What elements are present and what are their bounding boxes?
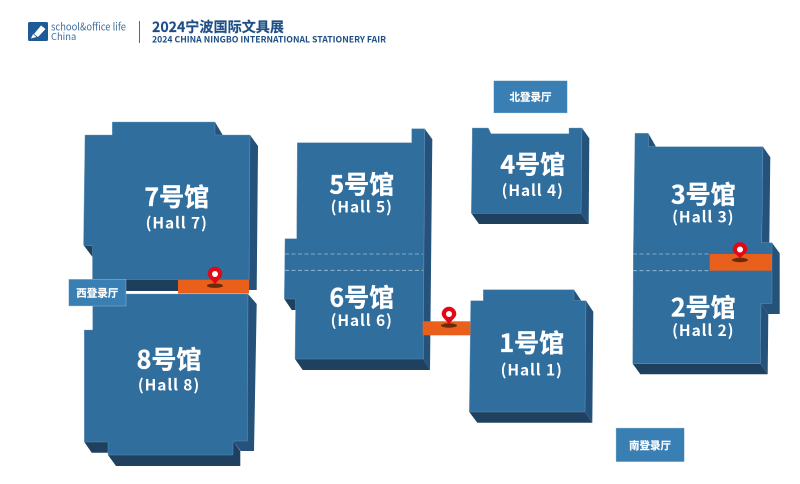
hall 1 name: 1号馆 <box>499 324 564 360</box>
hall 6 name: 6号馆 <box>329 279 394 315</box>
header divider <box>139 21 140 43</box>
panel: hall 1 <box>469 290 593 423</box>
hall 8 name: 8号馆 <box>137 341 201 377</box>
hall 6 english: (Hall 6) <box>331 309 393 331</box>
panel: halls 3 and 2 <box>633 133 780 374</box>
hall 1 english: (Hall 1) <box>501 359 563 381</box>
north lobby: 北登录厅 <box>510 90 552 104</box>
hall 8 english: (Hall 8) <box>138 374 200 396</box>
hall 4 english: (Hall 4) <box>502 179 564 201</box>
icon: pin west <box>207 267 223 288</box>
panel: hall 4 <box>471 128 589 224</box>
hall 5 name: 5号馆 <box>329 165 394 201</box>
panel: hall 8 <box>84 294 257 466</box>
west corridor <box>178 280 249 294</box>
hall 7 english: (Hall 7) <box>146 211 208 233</box>
hall 7 name: 7号馆 <box>144 178 209 214</box>
brand name: school&office life <box>51 18 126 34</box>
brand region: China <box>51 29 76 43</box>
subtitle: 2024 CHINA NINGBO INTERNATIONAL STATIONERY FAIR <box>152 32 386 46</box>
west lobby <box>69 279 126 306</box>
icon: logo pencil <box>28 22 48 41</box>
icon: pin central <box>441 307 457 328</box>
hall 4 name: 4号馆 <box>500 145 565 181</box>
hall 3 name: 3号馆 <box>671 176 736 212</box>
header <box>28 17 386 46</box>
panel: halls 5 and 6 <box>284 129 432 370</box>
south lobby <box>616 428 684 462</box>
corridor shadow <box>126 280 178 291</box>
title: 2024宁波国际文具展 <box>152 17 284 37</box>
hall 3 english: (Hall 3) <box>672 206 734 228</box>
orange corridor <box>710 254 772 271</box>
hall 2 name: 2号馆 <box>671 289 736 325</box>
hall 5 english: (Hall 5) <box>331 196 393 218</box>
panel: hall 7 <box>84 122 258 291</box>
south lobby: 南登录厅 <box>629 438 671 453</box>
icon: pin east <box>732 242 748 262</box>
central corridor <box>423 321 470 335</box>
north lobby <box>494 81 567 113</box>
hall 2 english: (Hall 2) <box>672 319 734 341</box>
west lobby: 西登录厅 <box>76 286 119 300</box>
